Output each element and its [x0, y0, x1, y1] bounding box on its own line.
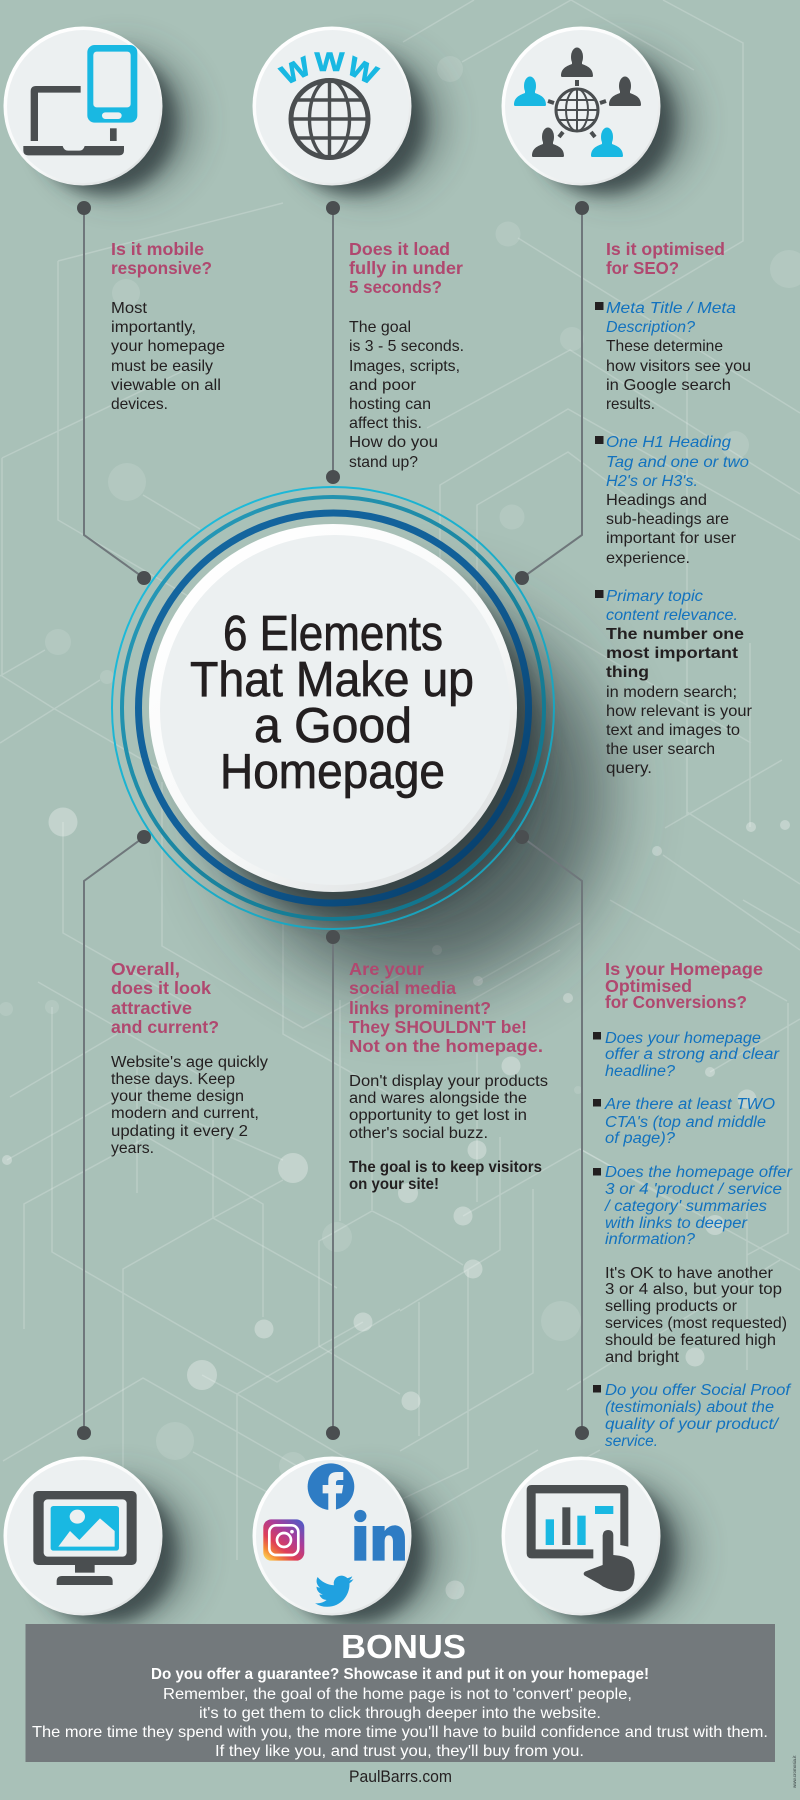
- bullet: headline: offer a strong and clear: [605, 1046, 780, 1063]
- text: social: other's social buzz.: [349, 1125, 488, 1142]
- text: speed: How do you: [349, 434, 438, 451]
- heading: design: [111, 959, 219, 1037]
- text: speed: hosting can: [349, 396, 431, 413]
- text: mobile: [111, 300, 225, 413]
- text: mobile: must be easily: [111, 358, 213, 375]
- callout: goal: on your site!: [349, 1176, 439, 1193]
- text: speed: The goal: [349, 319, 411, 336]
- bonus body text: Remember, the goal of the home page is not to 'convert' people,: [163, 1686, 632, 1703]
- text: mobile: importantly,: [111, 319, 196, 336]
- bullet: headings: H2's or H3's.: [606, 473, 698, 490]
- text: mobile: viewable on all: [111, 377, 221, 394]
- text: conversions note: and bright: [605, 1349, 680, 1366]
- heading: conversions: for Conversions?: [605, 992, 747, 1012]
- text: speed: affect this.: [349, 415, 422, 432]
- vertical image credit: www.cromosia.it: [792, 1755, 797, 1788]
- heading: speed: fully in under: [349, 258, 463, 278]
- bullet: social proof: service.: [605, 1433, 658, 1450]
- connector: seo: [522, 208, 582, 578]
- connector: conversions: [522, 837, 582, 1433]
- bullet: relevance: the user search: [606, 741, 715, 758]
- bullet: headings: [595, 434, 749, 567]
- column: mobile: [111, 239, 225, 413]
- bullet: summaries: / category' summaries: [604, 1198, 767, 1215]
- icon disc: monitor: [4, 1456, 162, 1616]
- background nodes faint: [0, 56, 800, 1480]
- icon: www text: [276, 47, 383, 91]
- connector: speed: [332, 208, 334, 477]
- heading: speed: [349, 239, 463, 297]
- bonus body text: The more time they spend with you, the more time you'll have to build confidence and trust with them.: [32, 1724, 768, 1741]
- bullet: relevance: how relevant is your: [606, 703, 753, 720]
- bullet: headings: experience.: [606, 550, 690, 567]
- text: design: updating it every 2: [111, 1123, 248, 1140]
- text: mobile: Most: [111, 300, 148, 317]
- text: speed: Images, scripts,: [349, 358, 460, 375]
- callout: goal: [349, 1159, 542, 1193]
- bullet: headings: One H1 Heading: [606, 434, 731, 451]
- heading: social: Not on the homepage.: [349, 1036, 543, 1056]
- icon disc: seo: [502, 26, 660, 186]
- bullet: meta title: Description?: [606, 319, 695, 336]
- heading: seo: [606, 239, 725, 278]
- heading: social: Are your: [349, 959, 424, 979]
- heading: mobile: responsive?: [111, 258, 212, 278]
- icon: person lower left: [532, 128, 564, 157]
- bullet: relevance: most important: [606, 645, 739, 662]
- bonus lead line: Do you offer a guarantee? Showcase it and put it on your homepage!: [151, 1666, 649, 1683]
- heading: design: Overall,: [111, 959, 180, 979]
- bullet: meta title: These determine: [606, 338, 723, 355]
- text: speed: is 3 - 5 seconds.: [349, 338, 464, 355]
- bullet: relevance: thing: [606, 664, 649, 681]
- bullet: headings: important for user: [606, 530, 737, 547]
- bullet: cta: CTA's (top and middle: [605, 1114, 766, 1131]
- connector: social: [332, 937, 334, 1433]
- icon: www text: W: [342, 51, 383, 91]
- circle shadows: [32, 50, 692, 1624]
- column: speed: [349, 239, 464, 471]
- icon: person right: [609, 76, 641, 106]
- heading: mobile: [111, 239, 212, 278]
- bullet: headline: [593, 1030, 780, 1080]
- bullet: summaries: with links to deeper: [605, 1215, 748, 1232]
- icon: www text: W: [314, 47, 345, 77]
- text: design: Website's age quickly: [111, 1054, 268, 1071]
- text: mobile: your homepage: [111, 338, 225, 355]
- bullet: summaries: [593, 1164, 793, 1248]
- bullet: headings: Headings and: [606, 492, 707, 509]
- icon: instagram: [263, 1519, 304, 1561]
- icon: tablet chart and pointing hand: [527, 1485, 635, 1591]
- text: speed: stand up?: [349, 454, 418, 471]
- text: design: years.: [111, 1140, 154, 1157]
- bullet: social proof: (testimonials) about the: [605, 1399, 774, 1416]
- heading: conversions: Is your Homepage: [605, 959, 763, 979]
- bullet: summaries: Does the homepage offer: [605, 1164, 793, 1181]
- bullet: headings: sub-headings are: [606, 511, 729, 528]
- icon disc: devices: [4, 26, 162, 186]
- bullet: relevance: text and images to: [606, 722, 740, 739]
- bullet: cta: [593, 1096, 775, 1147]
- bonus heading: BONUS: [341, 1628, 466, 1665]
- website credit: PaulBarrs.com: [349, 1768, 452, 1786]
- bonus body text: If they like you, and trust you, they'll buy from you.: [215, 1743, 584, 1760]
- bullet: relevance: [595, 588, 753, 777]
- heading: seo: for SEO?: [606, 258, 679, 278]
- icon: person top: [561, 48, 593, 77]
- bullet: cta: of page)?: [605, 1130, 675, 1147]
- text: conversions note: should be featured high: [605, 1332, 776, 1349]
- text: social: and wares alongside the: [349, 1090, 527, 1107]
- heading: conversions: [605, 959, 763, 1012]
- connector dots: [77, 201, 589, 1440]
- bullet: social proof: quality of your product/: [605, 1416, 780, 1433]
- icon: monitor with picture: [33, 1491, 137, 1585]
- bonus body text: [32, 1686, 768, 1760]
- heading: seo: Is it optimised: [606, 239, 725, 259]
- column: design: [111, 959, 268, 1157]
- heading: design: does it look: [111, 978, 211, 998]
- bullet: meta title: results.: [606, 396, 655, 413]
- text: mobile: devices.: [111, 396, 168, 413]
- text: conversions note: services (most requested): [605, 1315, 787, 1332]
- title: a Good: [254, 699, 412, 753]
- icon: facebook: [308, 1463, 354, 1511]
- connector: mobile: [84, 208, 144, 578]
- heading: conversions: Optimised: [605, 976, 692, 996]
- bullet: headings: Tag and one or two: [606, 454, 749, 471]
- column: seo: [595, 239, 753, 777]
- column: social: [349, 959, 548, 1193]
- heading: design: and current?: [111, 1017, 219, 1037]
- text: conversions note: It's OK to have another: [605, 1265, 773, 1282]
- text: social: Don't display your products: [349, 1073, 548, 1090]
- icon disc: analytics: [502, 1456, 660, 1616]
- icon: www text: W: [276, 51, 316, 91]
- heading: social: [349, 959, 543, 1056]
- icon: linkedin: [354, 1510, 405, 1561]
- bullet: meta title: Meta Title / Meta: [606, 300, 736, 317]
- text: speed: and poor: [349, 377, 417, 394]
- callout: goal: The goal is to keep visitors: [349, 1159, 542, 1176]
- title: [190, 607, 474, 799]
- text: conversions note: selling products or: [605, 1298, 737, 1315]
- icon disc: social media: [252, 1456, 412, 1616]
- icon: person left: [514, 76, 546, 106]
- bullet: social proof: [593, 1382, 792, 1450]
- bullet: meta title: how visitors see you: [606, 358, 751, 375]
- bonus body text: it's to get them to click through deeper into the website.: [199, 1705, 601, 1722]
- bullet: relevance: query.: [606, 760, 652, 777]
- heading: speed: 5 seconds?: [349, 277, 442, 297]
- heading: social: They SHOULDN'T be!: [349, 1017, 527, 1037]
- text: design: modern and current,: [111, 1105, 259, 1122]
- heading: social: social media: [349, 978, 456, 998]
- bullet: headline: Does your homepage: [605, 1030, 761, 1047]
- bullet: summaries: 3 or 4 'product / service: [605, 1181, 782, 1198]
- bullet: headline: headline?: [605, 1063, 675, 1080]
- text: speed: [349, 319, 464, 471]
- central rings: [112, 487, 554, 929]
- title: Homepage: [220, 745, 445, 799]
- text: conversions note: [605, 1265, 787, 1366]
- bullet: relevance: The number one: [606, 626, 744, 643]
- heading: mobile: Is it mobile: [111, 239, 204, 259]
- title: 6 Elements: [223, 607, 443, 661]
- bullet: meta title: [595, 300, 751, 413]
- bullet: relevance: Primary topic: [606, 588, 703, 605]
- column: conversions: [593, 959, 793, 1450]
- heading: speed: Does it load: [349, 239, 450, 259]
- bullet: social proof: Do you offer Social Proof: [605, 1382, 792, 1399]
- bullet: cta: Are there at least TWO: [604, 1096, 775, 1113]
- icon: person lower right: [591, 128, 623, 157]
- text: design: your theme design: [111, 1088, 244, 1105]
- icon: laptop and phone: [23, 45, 137, 155]
- heading: design: attractive: [111, 998, 192, 1018]
- text: conversions note: 3 or 4 also, but your top: [605, 1281, 782, 1298]
- central title disc: [149, 524, 517, 892]
- background nodes bright: [2, 808, 790, 1600]
- text: social: [349, 1073, 548, 1142]
- icon: twitter: [315, 1576, 353, 1607]
- text: design: these days. Keep: [111, 1071, 235, 1088]
- connector: design: [84, 837, 144, 1433]
- bullet: summaries: information?: [605, 1231, 695, 1248]
- text: design: [111, 1054, 268, 1157]
- icon disc: www globe: [252, 26, 412, 186]
- icon: globe: [291, 80, 368, 158]
- bonus panel: [26, 1624, 775, 1762]
- bullet: meta title: in Google search: [606, 377, 731, 394]
- bullet: relevance: in modern search;: [606, 684, 737, 701]
- icon: small globe with spokes: [548, 80, 606, 137]
- bullet: relevance: content relevance.: [606, 607, 738, 624]
- heading: social: links prominent?: [349, 998, 491, 1018]
- text: social: opportunity to get lost in: [349, 1107, 527, 1124]
- title: That Make up: [190, 653, 474, 707]
